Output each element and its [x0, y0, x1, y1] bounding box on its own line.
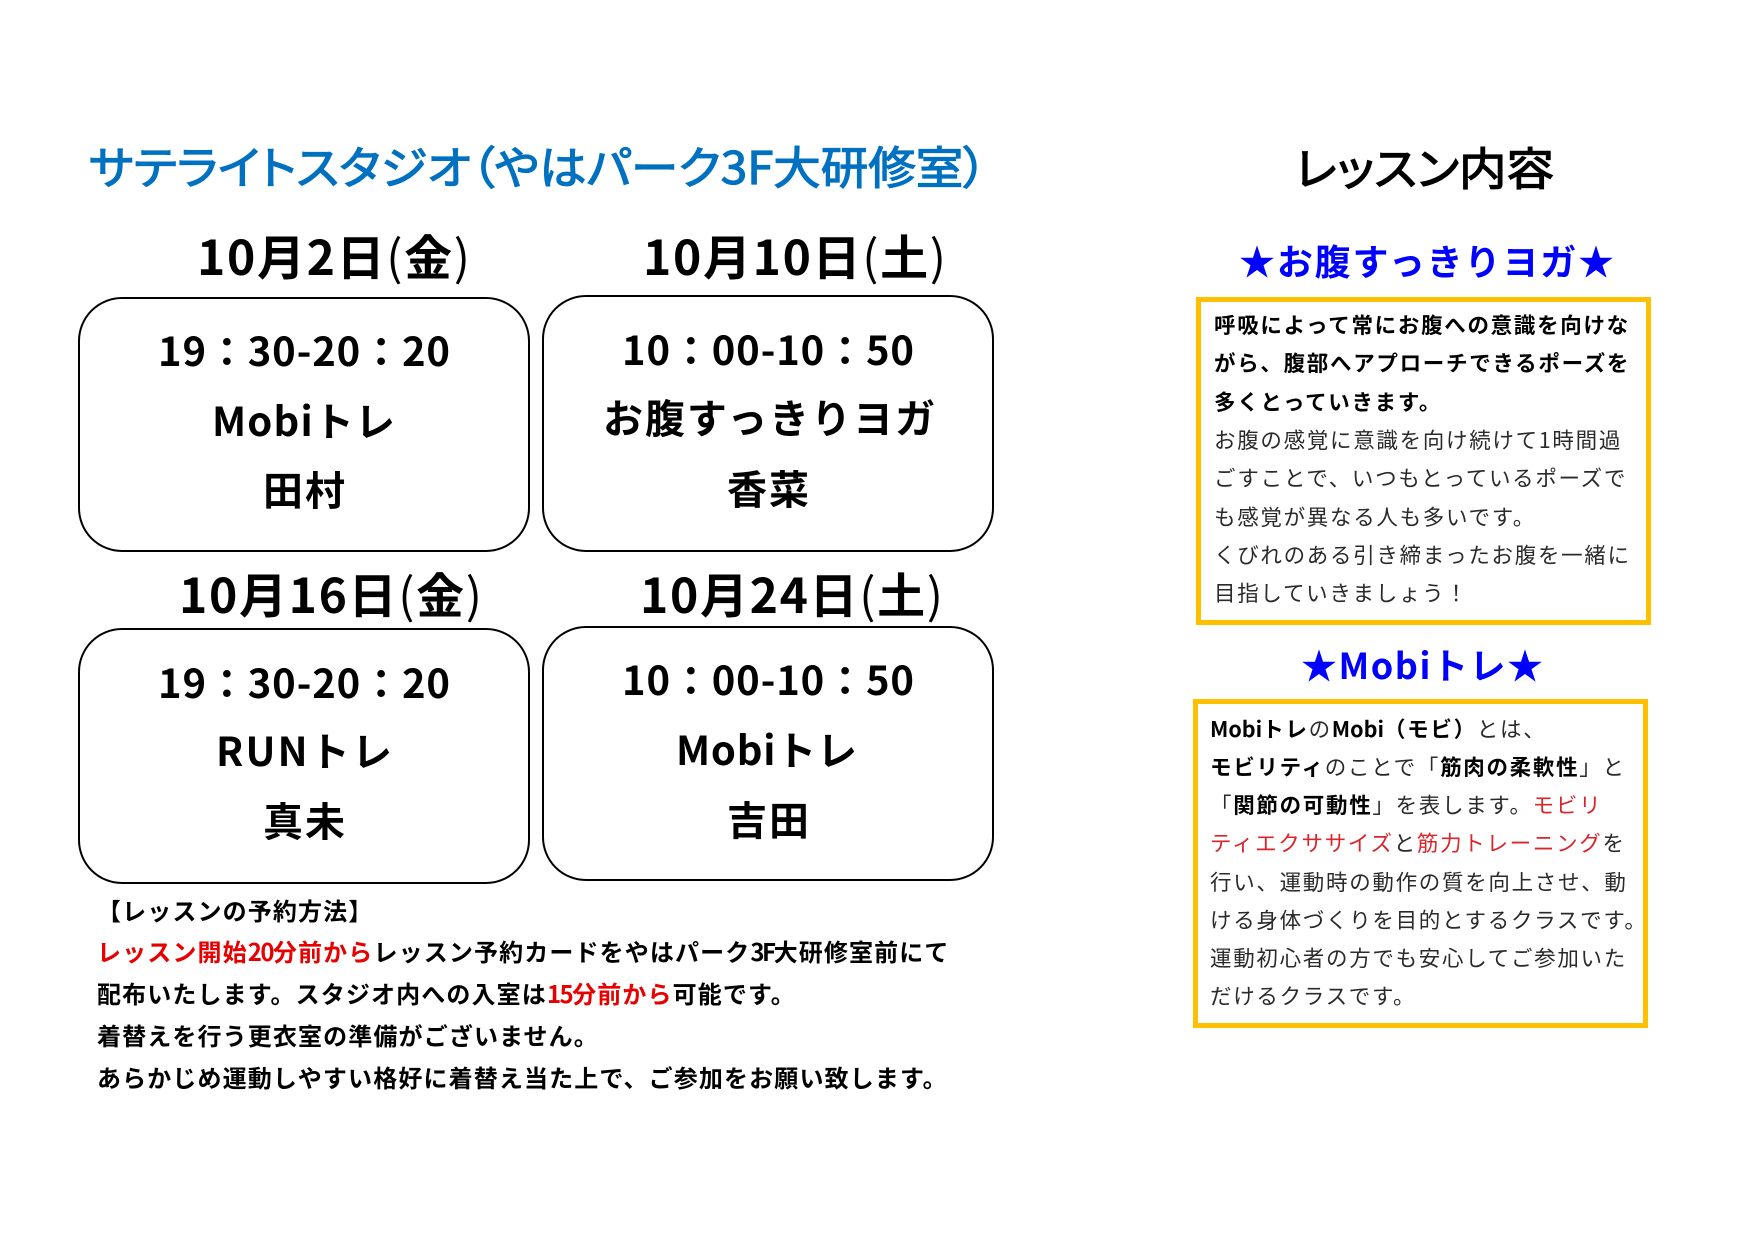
panel: Mobi training description [1196, 702, 1648, 1026]
panel: October 2 lesson [79, 298, 529, 551]
panel: October 24 lesson: 10：00-10：50 [622, 649, 914, 707]
text block: reservation method: 配布いたします。スタジオ内への入室は15分前から可能です。 [97, 975, 796, 1010]
panel: Mobi training description: ティエクササイズと筋力トレーニングを [1210, 827, 1626, 858]
panel: October 10 lesson: お腹すっきりヨガ [603, 387, 935, 445]
panel: tummy yoga description [1198, 300, 1648, 622]
panel: October 2 lesson: Mobiトレ [212, 390, 395, 448]
panel: tummy yoga description: 多くとっていきます。 [1214, 386, 1442, 417]
panel: October 16 lesson: 真未 [263, 790, 345, 848]
heading: lesson content: レッスン内容 [1295, 133, 1554, 198]
panel: October 10 lesson: 香菜 [727, 458, 809, 516]
panel: Mobi training description: MobiトレのMobi（モビ）とは、 [1210, 713, 1546, 744]
panel: tummy yoga description: ごすことで、いつもとっているポーズで [1214, 462, 1627, 493]
panel: October 24 lesson: Mobiトレ [676, 719, 857, 777]
panel: October 24 lesson [543, 627, 993, 880]
heading: tummy yoga: ★お腹すっきりヨガ★ [1239, 234, 1614, 286]
date: October 24: 10月24日(土) [640, 557, 943, 627]
heading: Mobi training: ★Mobiトレ★ [1301, 638, 1543, 690]
panel: tummy yoga description: がら、腹部へアプローチできるポーズを [1214, 347, 1630, 378]
panel: tummy yoga description: 呼吸によって常にお腹への意識を向けな [1214, 309, 1630, 340]
panel: October 24 lesson: 吉田 [727, 789, 809, 847]
panel: Mobi training description: だけるクラスです。 [1210, 980, 1416, 1011]
panel: October 10 lesson: 10：00-10：50 [622, 319, 914, 377]
title: satellite studio: サテライトスタジオ（やはパーク3F大研修室） [89, 132, 987, 197]
panel: October 16 lesson: 19：30-20：20 [158, 652, 450, 710]
text block: reservation method: 【レッスンの予約方法】 [97, 892, 373, 927]
panel: tummy yoga description: お腹の感覚に意識を向け続けて1時間過 [1214, 424, 1622, 455]
panel: October 16 lesson: RUNトレ [216, 720, 392, 778]
panel: October 2 lesson: 19：30-20：20 [158, 320, 450, 378]
panel: Mobi training description: モビリティのことで「筋肉の柔軟性」と [1210, 751, 1626, 782]
text block: reservation method [97, 892, 950, 1094]
panel: Mobi training description: ける身体づくりを目的とするクラスです。 [1210, 904, 1648, 935]
panel: Mobi training description: 運動初心者の方でも安心してご参加いた [1210, 942, 1627, 973]
panel: October 10 lesson [543, 296, 993, 551]
panel: Mobi training description: 行い、運動時の動作の質を向上させ、動 [1210, 866, 1628, 897]
date: October 2: 10月2日(金) [197, 219, 470, 289]
panel: October 16 lesson [79, 629, 529, 883]
panel: October 2 lesson: 田村 [263, 459, 345, 517]
date: October 10: 10月10日(土) [643, 219, 946, 289]
date: October 16: 10月16日(金) [179, 557, 482, 627]
panel: tummy yoga description: 目指していきましょう！ [1214, 577, 1469, 608]
panel: Mobi training description: 「関節の可動性」を表します。モビリ [1210, 789, 1602, 820]
text block: reservation method: レッスン開始20分前からレッスン予約カードをやはパーク3F大研修室前にて [97, 933, 950, 968]
text block: reservation method: 着替えを行う更衣室の準備がございません。 [97, 1017, 599, 1052]
panel: tummy yoga description: も感覚が異なる人も多いです。 [1214, 501, 1536, 532]
text block: reservation method: あらかじめ運動しやすい格好に着替え当た上で、ご参加をお願い致します。 [97, 1059, 948, 1094]
panel: tummy yoga description: くびれのある引き締まったお腹を一緒に [1214, 539, 1631, 570]
